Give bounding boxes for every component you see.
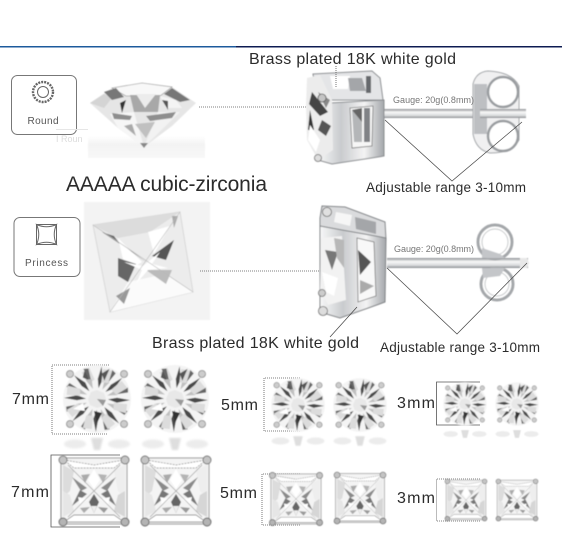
size row: round 5mm: 5mm <box>221 397 258 414</box>
callout lines: bottom earring <box>330 263 527 337</box>
panel: princess badge <box>14 218 80 276</box>
butterfly back <box>478 225 512 259</box>
size row: princess 5mm: 5mm <box>220 485 257 502</box>
size row: round 3mm: 3mm <box>397 395 435 412</box>
post <box>387 258 528 268</box>
size row: round 3mm <box>397 375 546 438</box>
heading: top plating label: Brass plated 18K white gold <box>249 51 456 68</box>
lower body <box>318 100 384 164</box>
size row: princess 7mm: 7mm <box>11 484 49 501</box>
size row: princess 3mm: 3mm <box>397 490 435 507</box>
size row: princess 5mm <box>220 472 386 526</box>
label: gauge bottom: Gauge: 20g(0.8mm) <box>394 244 474 254</box>
upper basket <box>320 206 386 240</box>
dotted leader: princess <box>200 270 322 272</box>
panel: princess badge: Princess <box>25 258 68 269</box>
header rule <box>0 46 562 48</box>
label: adjustable range bottom: Adjustable range 3-10mm <box>380 340 540 355</box>
label: adjustable range top: Adjustable range 3-10mm <box>366 180 526 195</box>
heading: AAAAA cubic-zirconia: AAAAA cubic-zirconia <box>66 173 267 196</box>
callout lines: top earring <box>336 66 522 181</box>
dotted leader: round <box>199 106 312 108</box>
size row: round 7mm <box>12 354 220 450</box>
earring: princess stud side view <box>318 206 529 318</box>
lower body <box>320 226 386 318</box>
size row: round 5mm <box>221 370 395 446</box>
stone <box>320 236 346 305</box>
panel: round badge <box>12 76 76 134</box>
image: round diamond side view <box>88 83 205 158</box>
size row: princess 3mm <box>397 479 538 521</box>
faint ghost label <box>56 129 88 144</box>
label: lower plating: Brass plated 18K white gold <box>152 335 359 352</box>
size row: round 7mm: 7mm <box>12 391 49 408</box>
earring: round stud side view <box>306 71 526 164</box>
size row: princess 7mm <box>11 455 211 527</box>
image: princess diamond <box>84 202 210 320</box>
post <box>383 109 526 118</box>
icon: princess cut <box>36 224 56 244</box>
panel: round badge: Round <box>28 116 58 127</box>
icon: round cut <box>33 82 53 102</box>
faint ghost label: I Roun <box>56 134 83 144</box>
butterfly back <box>473 71 519 153</box>
label: gauge top: Gauge: 20g(0.8mm) <box>393 95 474 105</box>
upper basket <box>313 71 383 100</box>
stone <box>306 75 333 160</box>
